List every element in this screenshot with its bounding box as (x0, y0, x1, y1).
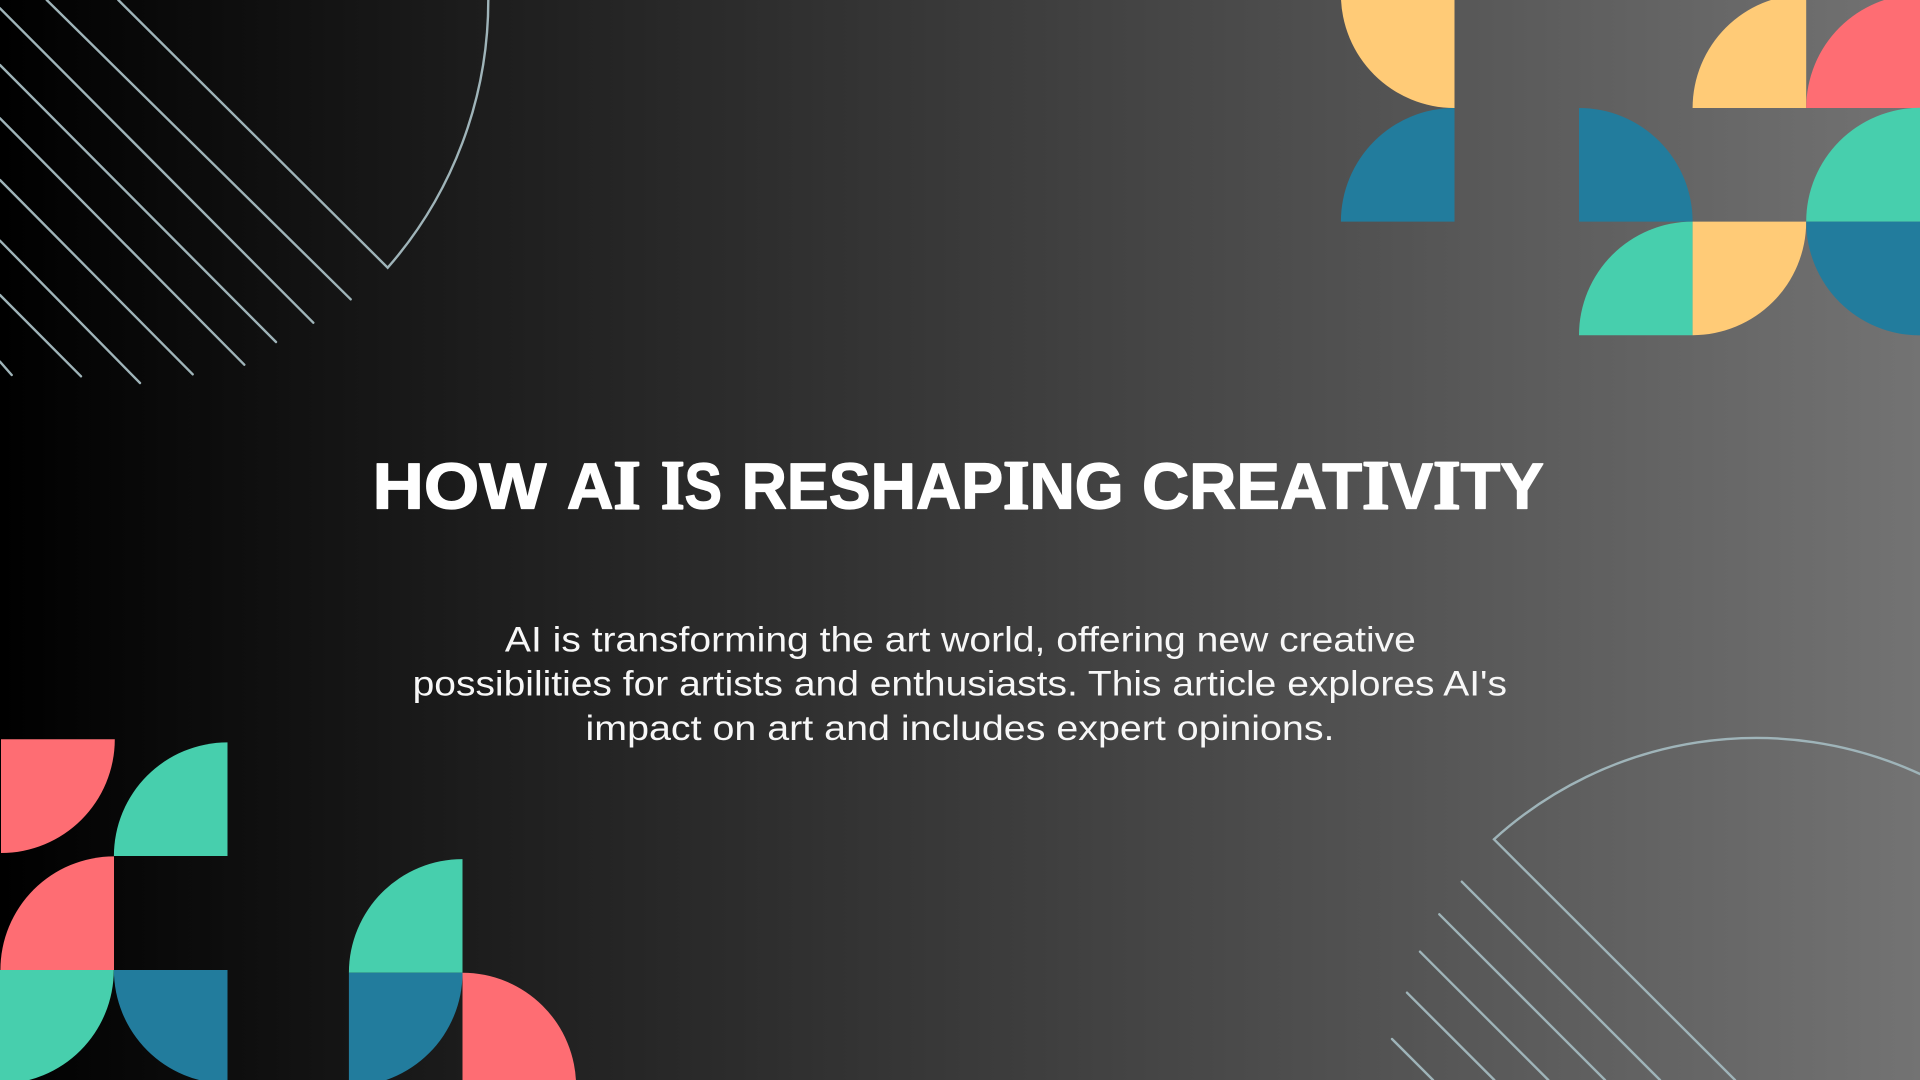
description text: AI is transforming the art world, offering new creative (505, 621, 1416, 660)
line art: top-left sector with diagonal lines (0, 0, 488, 383)
geometric shapes: bottom-left cluster (0, 739, 228, 1080)
title: AI (567, 448, 641, 525)
title (372, 448, 1544, 525)
title: CREATIVITY (1142, 448, 1544, 525)
line art: bottom-right sector with diagonal lines (1392, 738, 1920, 1080)
geometric shapes: top-right cluster (1341, 0, 1920, 335)
description text: impact on art and includes expert opinions. (586, 709, 1334, 748)
title: HOW (372, 450, 547, 523)
geometric shapes: bottom-centre-left cluster (349, 859, 576, 1080)
description text: possibilities for artists and enthusiasts. This article explores AI's (413, 665, 1507, 704)
title: IS (661, 448, 722, 525)
title: RESHAPING (742, 448, 1124, 525)
description text (413, 621, 1507, 748)
